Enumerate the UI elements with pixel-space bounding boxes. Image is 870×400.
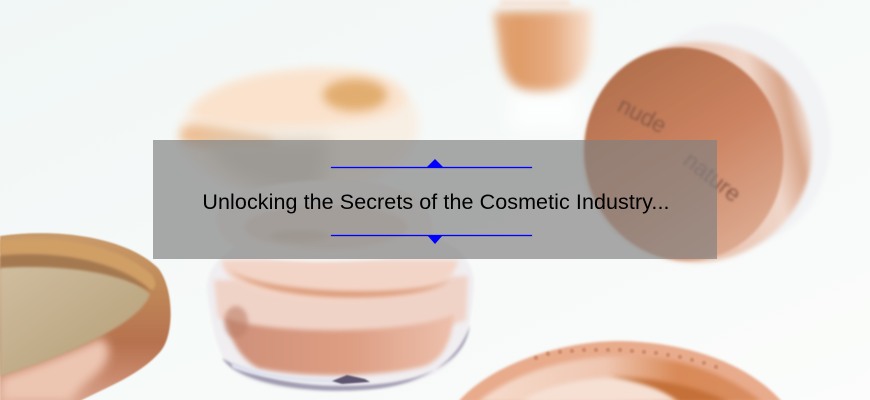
open lid at bottom	[458, 341, 782, 400]
bottom divider with down arrow	[330, 234, 532, 244]
jar with nude powder, lying on its side	[561, 2, 854, 286]
lid interior	[0, 267, 150, 376]
glass base	[222, 325, 470, 391]
pink glass lip	[214, 276, 468, 335]
open lid at lower left	[0, 233, 171, 400]
rim dots	[534, 348, 718, 369]
lid face	[562, 26, 806, 282]
lid rim	[561, 18, 835, 286]
loose powder surface	[244, 205, 408, 249]
shadow in powder	[224, 306, 248, 338]
powder fill	[226, 314, 454, 375]
compact at rear left	[180, 69, 419, 195]
top divider with up arrow	[330, 159, 532, 169]
inner white ring	[216, 180, 433, 262]
translucent title panel	[153, 140, 717, 259]
title text: Unlocking the Secrets of the Cosmetic Industry...	[202, 190, 670, 214]
top bottle	[494, 0, 592, 130]
brand text on lid: nude	[614, 91, 671, 138]
glass body	[207, 225, 474, 392]
front glass jar with powder	[207, 180, 474, 392]
brand text on lid	[614, 91, 746, 207]
upper powder band	[222, 260, 458, 302]
glass jar body	[606, 2, 854, 268]
brand text on lid: nature	[679, 146, 746, 207]
